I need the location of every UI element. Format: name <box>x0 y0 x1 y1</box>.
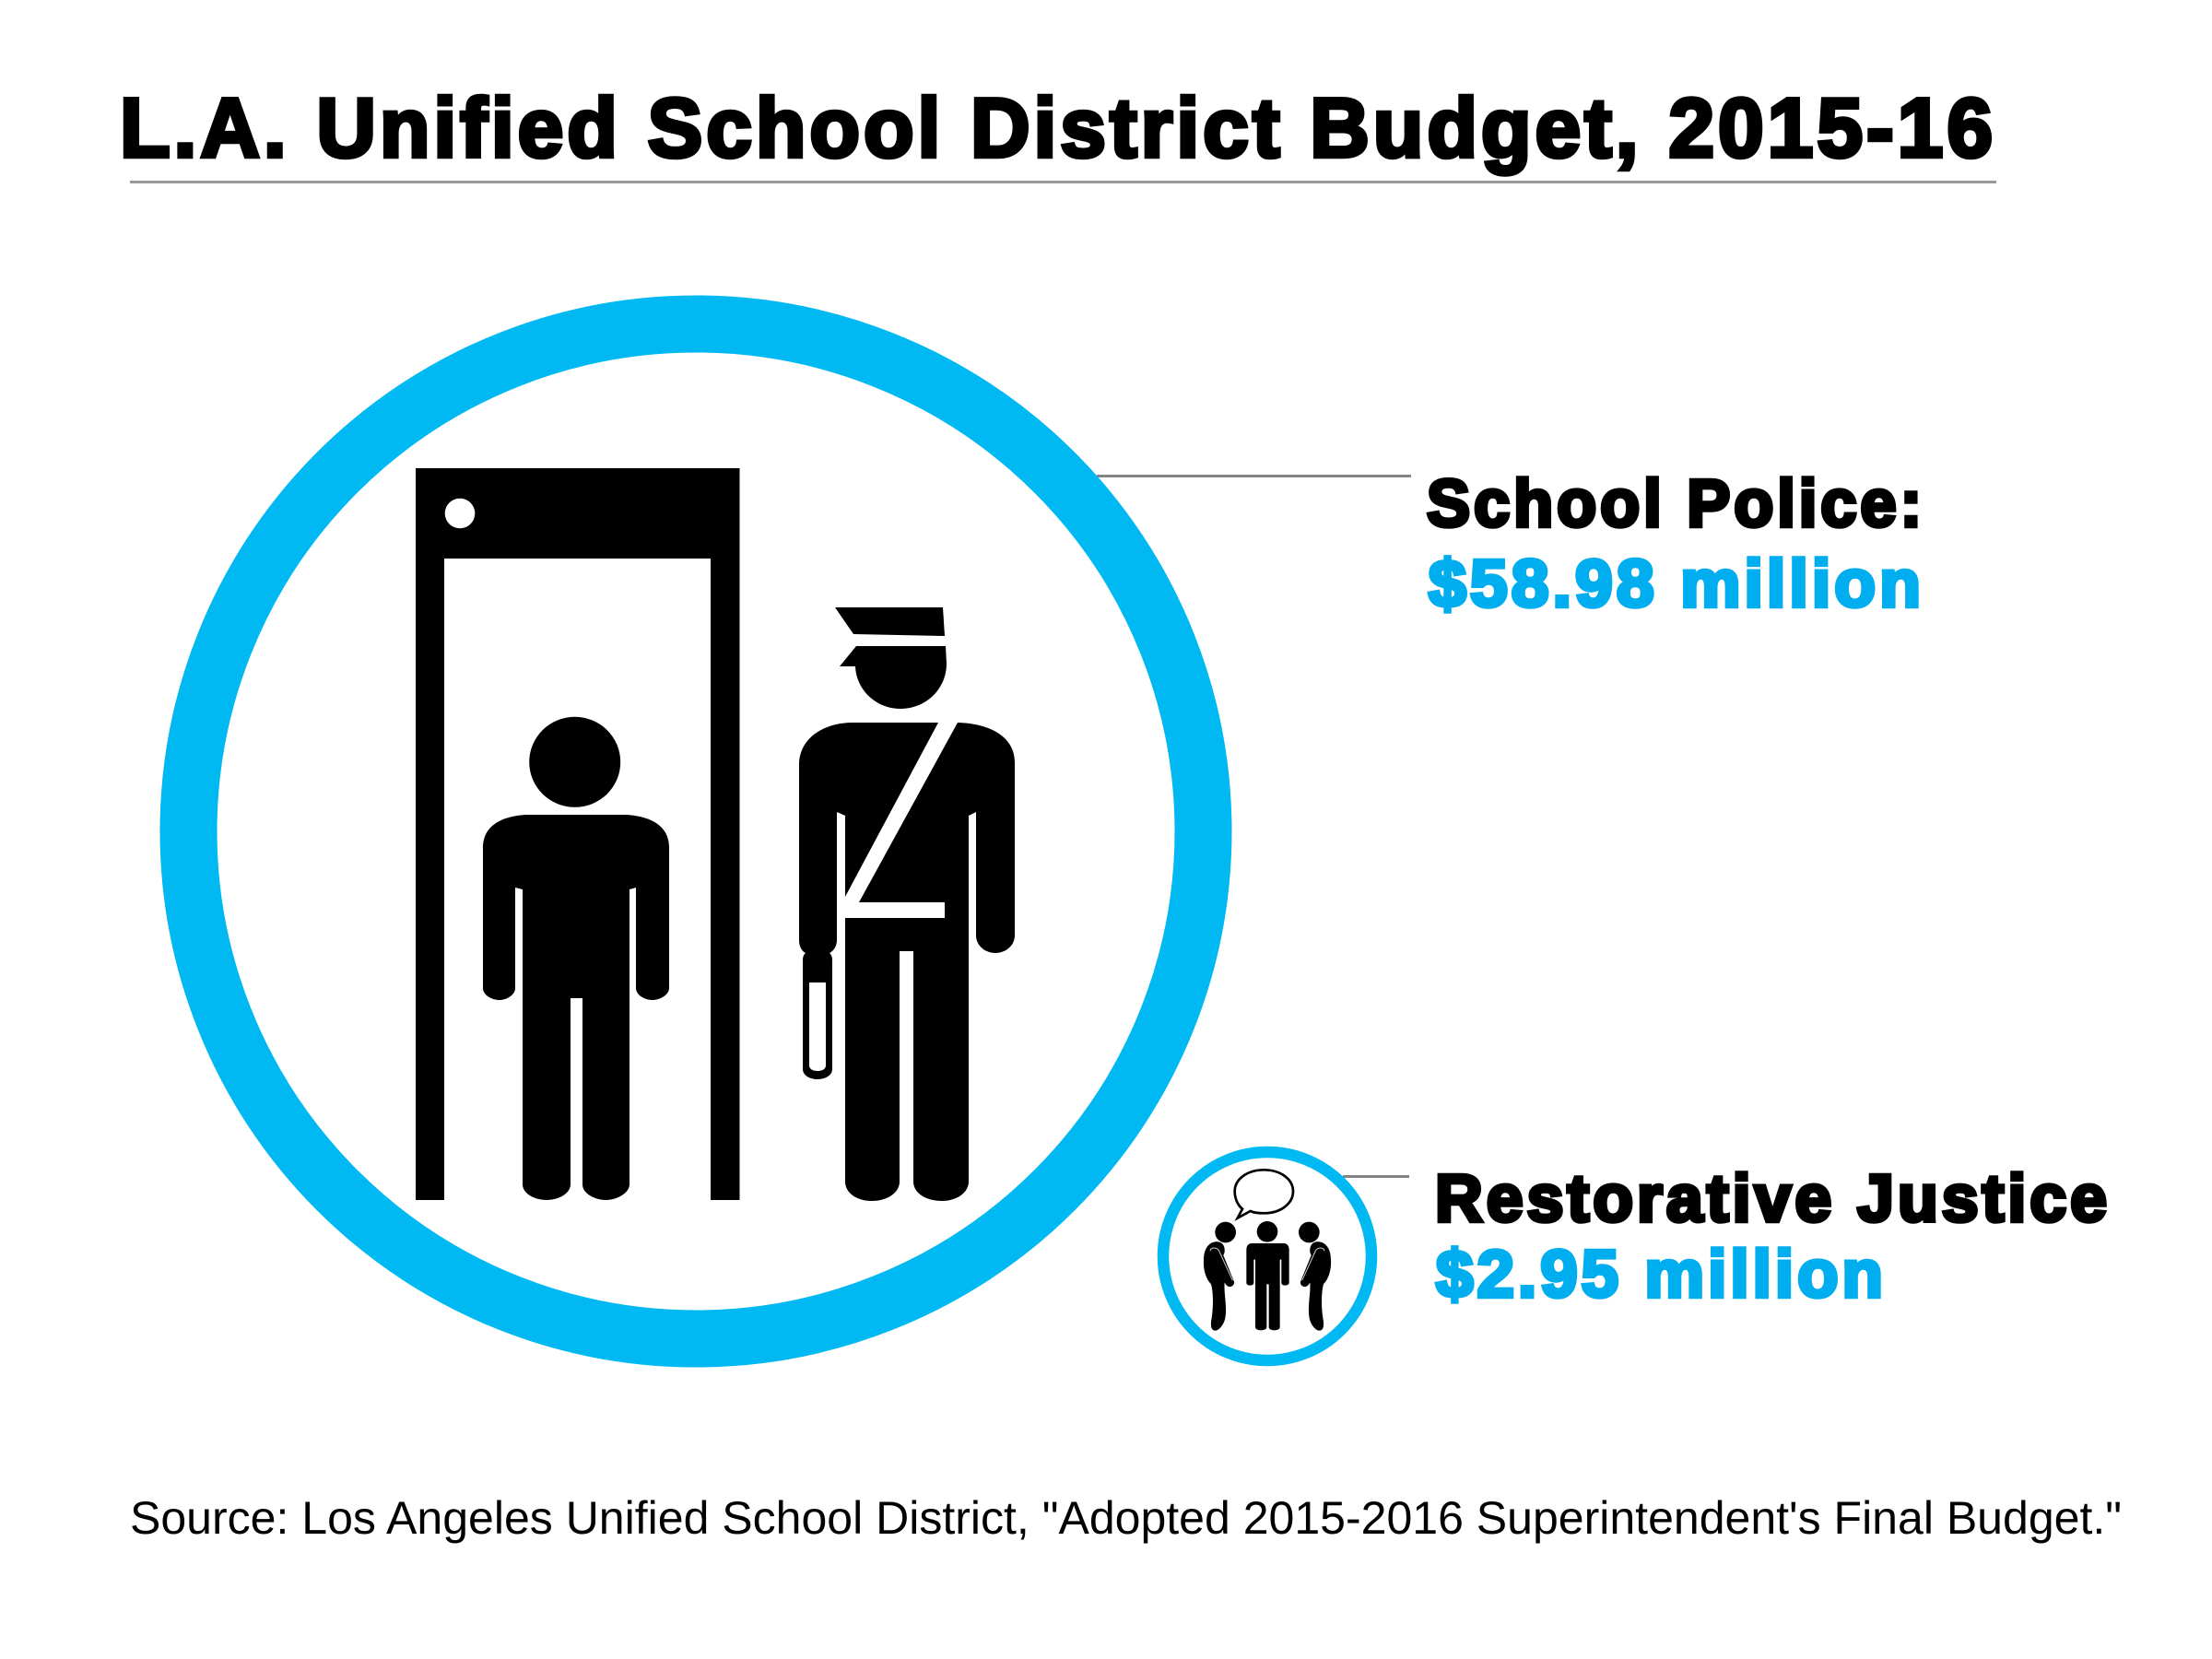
speech bubble <box>1235 1170 1293 1218</box>
leader line: restorative justice <box>1343 1175 1409 1178</box>
icon: restorative justice group <box>1204 1170 1331 1331</box>
police torso, left arm and baton <box>799 723 938 1079</box>
large blue circle: school police budget <box>188 324 1204 1338</box>
left person <box>1204 1222 1236 1331</box>
police cap <box>835 607 945 636</box>
amount: school police: $58.98 million <box>1429 547 1924 621</box>
icon: police officer <box>799 607 1015 1201</box>
label: school police <box>1427 467 1925 621</box>
label: restorative justice: Restorative Justice <box>1435 1162 2111 1236</box>
small blue circle: restorative justice budget <box>1163 1152 1371 1360</box>
label: restorative justice <box>1435 1162 2111 1312</box>
amount: restorative justice: $2.95 million <box>1436 1238 1887 1312</box>
leader line: school police <box>1097 475 1411 477</box>
title: L.A. Unified School District Budget, 2015-16 <box>120 82 1996 175</box>
center person <box>1246 1221 1289 1330</box>
right person <box>1299 1222 1331 1331</box>
label: school police: School Police: <box>1427 467 1925 541</box>
police head <box>840 646 947 709</box>
icon: person walking through detector <box>483 717 669 1200</box>
police right side and legs <box>845 723 1015 1201</box>
icon: metal detector gate <box>416 468 739 1200</box>
source note: Source: Los Angeles Unified School District, "Adopted 2015-2016 Superintendent's Final Budget." <box>130 1492 2122 1544</box>
